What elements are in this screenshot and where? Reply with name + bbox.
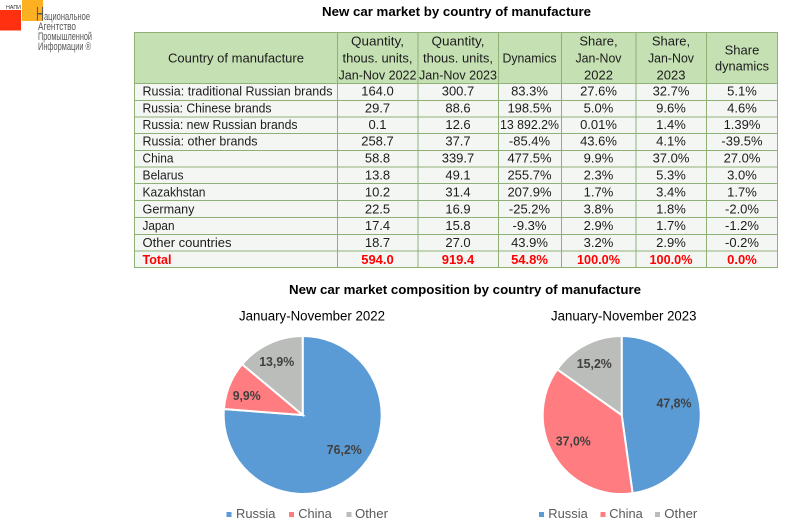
row: Japan: 1.7% xyxy=(656,218,686,233)
row: other brands: 258.7 xyxy=(361,134,394,149)
row: traditional Russian brands: 27.6% xyxy=(580,84,617,99)
row: China: 477.5% xyxy=(507,151,552,166)
legend 2022: Russia xyxy=(236,506,276,521)
row: Other countries: -0.2% xyxy=(725,235,759,250)
row: new Russian brands: 13 892.2% xyxy=(500,117,559,132)
table header: 2023 xyxy=(657,68,685,83)
row: new Russian brands xyxy=(142,117,761,132)
row: Germany: 1.8% xyxy=(656,202,686,217)
row: Other countries: 18.7 xyxy=(365,235,390,250)
row: Total xyxy=(142,252,757,267)
table header: Share, xyxy=(652,34,690,49)
row: Kazakhstan: 1.7% xyxy=(584,184,614,200)
row: Japan: Japan xyxy=(142,218,174,233)
row: new Russian brands: 1.4% xyxy=(656,117,686,132)
row: Belarus: 255.7% xyxy=(507,168,552,183)
row: Other countries: 2.9% xyxy=(656,235,686,250)
row: traditional Russian brands: 300.7 xyxy=(442,84,474,99)
logo: ациональное xyxy=(44,11,90,23)
table header: Share xyxy=(725,42,759,57)
row: Chinese brands: 198.5% xyxy=(507,100,552,115)
row: Japan: 2.9% xyxy=(584,218,614,233)
row: Total: 100.0% xyxy=(650,252,693,267)
row: Japan: 17.4 xyxy=(365,218,390,233)
row: Other countries: 27.0 xyxy=(445,235,471,250)
pie labels 2023 xyxy=(556,356,692,449)
table header xyxy=(168,34,769,83)
row: Belarus: 3.0% xyxy=(727,168,757,183)
table header: Dynamics xyxy=(502,50,557,65)
legend 2022 xyxy=(226,506,389,521)
row: Japan: -9.3% xyxy=(513,218,547,233)
pie labels 2023: 37,0% xyxy=(556,434,591,449)
row: other brands xyxy=(142,134,763,149)
row: new Russian brands: 12.6 xyxy=(445,117,471,132)
row: China: 58.8 xyxy=(365,151,390,166)
row: new Russian brands: 1.39% xyxy=(724,117,761,132)
row: Chinese brands: 88.6 xyxy=(445,100,471,115)
row: Kazakhstan xyxy=(142,184,757,200)
legend 2023: Russia xyxy=(548,506,589,521)
chart title 2022: January-November 2022 xyxy=(239,309,385,324)
legend 2022: China xyxy=(298,506,333,521)
logo: Н xyxy=(36,4,44,26)
row: other brands: 43.6% xyxy=(580,134,617,149)
row: Germany: 3.8% xyxy=(584,202,614,217)
row: Other countries: Other countries xyxy=(142,235,232,250)
table header: Jan-Nov 2023 xyxy=(419,68,497,83)
logo: Промышленной xyxy=(38,31,92,43)
row: new Russian brands: 0.01% xyxy=(580,117,617,132)
pie labels 2022: 13,9% xyxy=(259,354,295,369)
table header: Quantity, xyxy=(432,34,484,49)
pie labels 2022 xyxy=(233,354,362,457)
title: table: New car market by country of manufacture xyxy=(322,5,591,19)
table header: thous. units, xyxy=(423,51,493,66)
row: other brands: -39.5% xyxy=(721,134,763,149)
row: other brands: 4.1% xyxy=(656,134,686,149)
row: Chinese brands xyxy=(142,100,757,115)
row: other brands: Russia: other brands xyxy=(142,134,258,149)
row: Chinese brands: 5.0% xyxy=(584,100,614,115)
legend 2022: Other xyxy=(355,506,389,521)
table header: Country of manufacture xyxy=(168,50,304,65)
row: Chinese brands: 29.7 xyxy=(365,100,390,115)
legend 2023: Other xyxy=(664,506,698,521)
row: traditional Russian brands: 83.3% xyxy=(511,84,548,99)
row: Japan: -1.2% xyxy=(725,218,759,233)
legend 2023 xyxy=(539,506,698,521)
row: Germany xyxy=(142,202,759,217)
row: other brands: 37.7 xyxy=(445,134,471,149)
row: Belarus: 5.3% xyxy=(656,168,686,183)
row: new Russian brands: Russia: new Russian brands xyxy=(142,117,298,132)
row: Germany: -2.0% xyxy=(725,202,759,217)
row: Chinese brands: 4.6% xyxy=(727,100,757,115)
row: traditional Russian brands: 164.0 xyxy=(361,84,394,99)
row: Total: 0.0% xyxy=(727,252,757,267)
row: Japan xyxy=(142,218,759,233)
row: Total: Total xyxy=(142,252,172,267)
logo: Информации ® xyxy=(38,41,91,53)
table header: thous. units, xyxy=(342,51,412,66)
row: Other countries xyxy=(142,235,759,250)
row: Kazakhstan: 3.4% xyxy=(656,184,686,200)
pie labels 2023: 47,8% xyxy=(656,396,692,411)
chart title 2023: January-November 2023 xyxy=(551,309,696,324)
row: China: 9.9% xyxy=(584,151,614,166)
row: other brands: -85.4% xyxy=(509,134,551,149)
row: Belarus xyxy=(142,168,757,183)
pie slices 2022 xyxy=(224,336,382,494)
pie labels 2022: 9,9% xyxy=(233,388,261,403)
table header: 2022 xyxy=(584,68,613,83)
row: Germany: 16.9 xyxy=(445,202,471,217)
legend 2023: China xyxy=(609,506,644,521)
pie labels 2022: 76,2% xyxy=(327,442,362,457)
row: Kazakhstan: 10.2 xyxy=(365,184,390,200)
pie labels 2023: 15,2% xyxy=(577,356,612,371)
row: China: 37.0% xyxy=(653,151,690,166)
pie chart 2023 xyxy=(539,309,701,521)
table header: Jan-Nov 2022 xyxy=(338,68,416,83)
table header: Jan-Nov xyxy=(576,51,622,66)
row: Total: 54.8% xyxy=(511,252,548,267)
table header: Quantity, xyxy=(351,34,404,49)
row: Chinese brands: 9.6% xyxy=(656,100,686,115)
row: Kazakhstan: 207.9% xyxy=(507,184,552,200)
row: Total: 100.0% xyxy=(577,252,620,267)
row: Other countries: 43.9% xyxy=(511,235,548,250)
row: China xyxy=(142,151,761,166)
table header: dynamics xyxy=(715,59,769,74)
table header: Jan-Nov xyxy=(648,51,694,66)
row: Belarus: 2.3% xyxy=(584,168,614,183)
row: Kazakhstan: Kazakhstan xyxy=(142,184,206,200)
row: traditional Russian brands xyxy=(142,84,757,99)
row: China: 339.7 xyxy=(442,151,474,166)
row: traditional Russian brands: 5.1% xyxy=(727,84,757,99)
row: Total: 594.0 xyxy=(361,252,394,267)
row: Belarus: 13.8 xyxy=(365,168,390,183)
row: China: 27.0% xyxy=(724,151,761,166)
row: Kazakhstan: 31.4 xyxy=(445,184,471,200)
logo xyxy=(0,0,92,53)
row: Kazakhstan: 1.7% xyxy=(727,184,757,200)
row: new Russian brands: 0.1 xyxy=(368,117,387,132)
row: Japan: 15.8 xyxy=(445,218,471,233)
table xyxy=(134,32,778,268)
row: Germany: -25.2% xyxy=(509,202,551,217)
row: traditional Russian brands: Russia: traditional Russian brands xyxy=(142,84,333,99)
row: China: China xyxy=(142,151,174,166)
row: Chinese brands: Russia: Chinese brands xyxy=(142,100,272,115)
row: Germany: Germany xyxy=(142,202,195,217)
pie slices 2023 xyxy=(543,336,701,494)
row: Germany: 22.5 xyxy=(365,202,390,217)
title: charts: New car market composition by country of manufacture xyxy=(289,283,641,297)
row: Total: 919.4 xyxy=(442,252,475,267)
logo: Агентство xyxy=(38,21,76,33)
row: Belarus: Belarus xyxy=(142,168,184,183)
row: traditional Russian brands: 32.7% xyxy=(653,84,690,99)
table header: Share, xyxy=(579,34,618,49)
row: Belarus: 49.1 xyxy=(445,168,471,183)
logo: НАПИ xyxy=(6,5,21,11)
pie chart 2022 xyxy=(224,309,389,521)
row: Other countries: 3.2% xyxy=(584,235,614,250)
